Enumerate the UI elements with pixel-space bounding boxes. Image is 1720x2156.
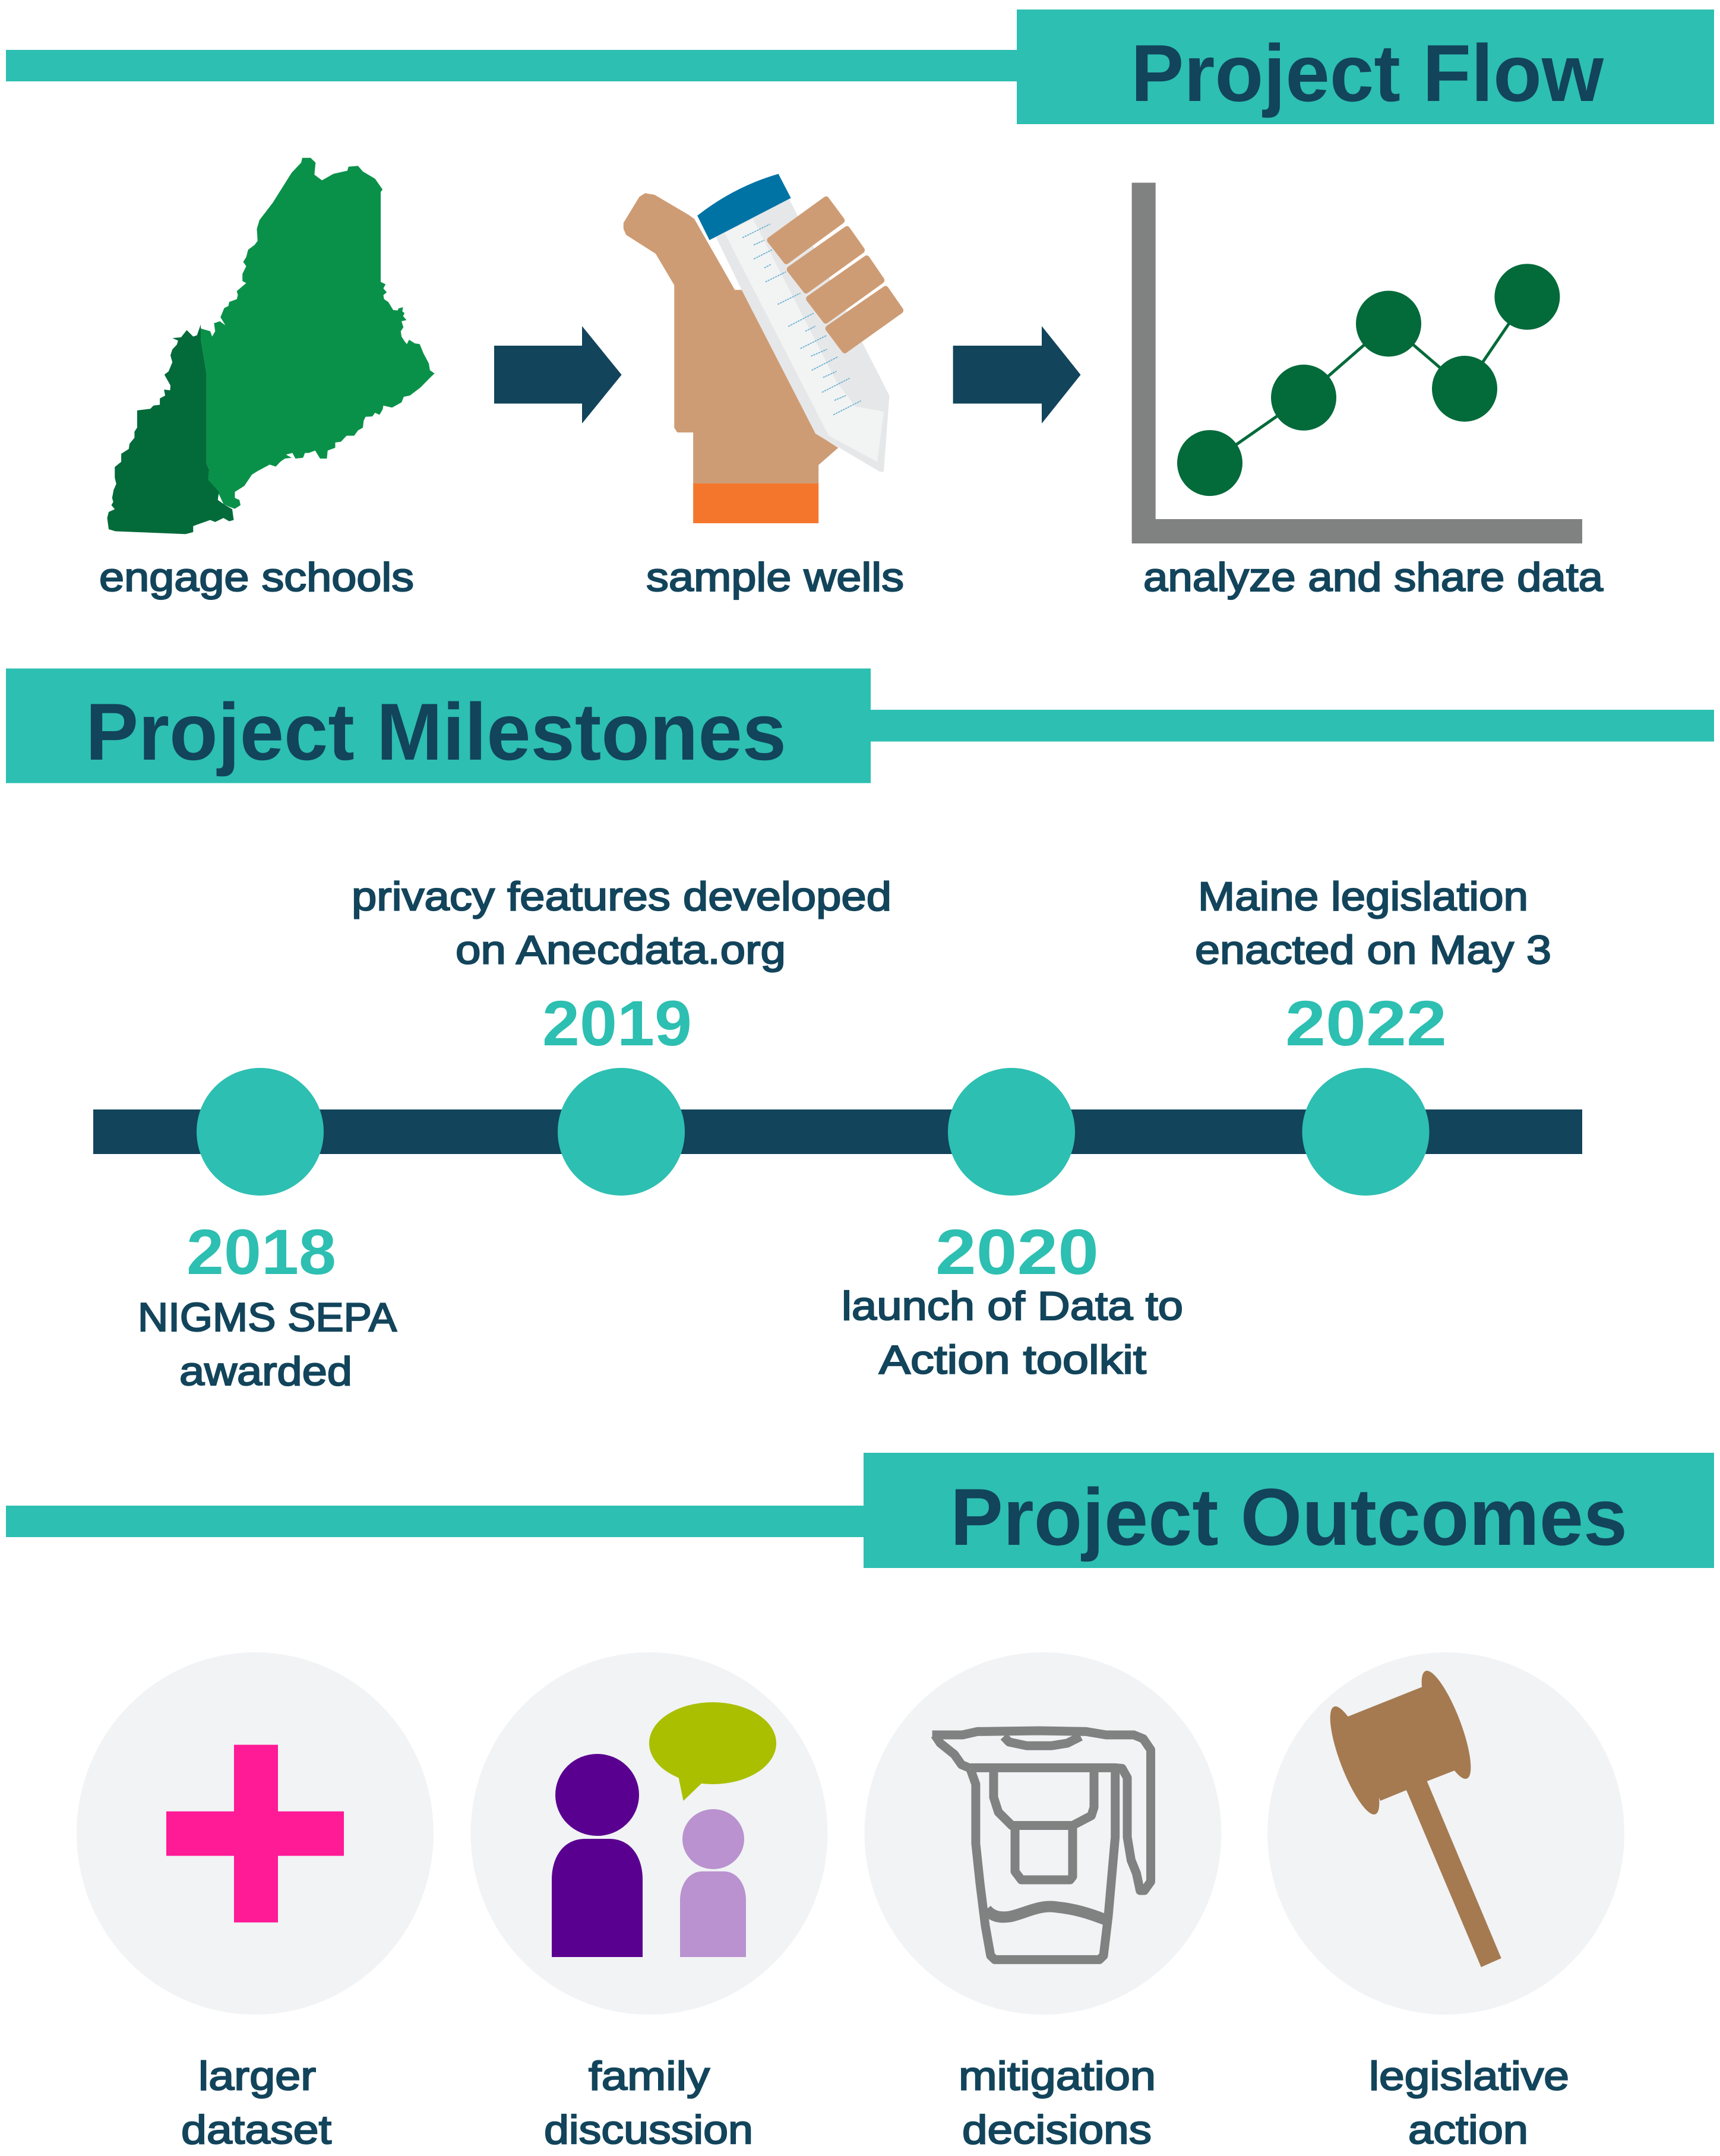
icon backdrop circle xyxy=(470,1652,828,2015)
map region: western Maine xyxy=(107,324,234,534)
header: Project Flow xyxy=(6,10,1714,124)
section: project outcomes xyxy=(6,1453,1714,2152)
icon: hand holding sample tube xyxy=(624,174,900,523)
milestone 2022 xyxy=(1195,874,1551,1059)
caption: legislative action: action xyxy=(1408,2107,1528,2152)
icon: speech bubble xyxy=(649,1702,776,1801)
milestone 2018: 2018 xyxy=(186,1216,336,1288)
chart axes xyxy=(1132,183,1582,543)
icon: water filter pitcher xyxy=(932,1731,1151,1959)
caption: mitigation decisions: decisions xyxy=(962,2107,1152,2152)
milestone 2020 xyxy=(842,1216,1183,1383)
caption: larger dataset: dataset xyxy=(181,2107,331,2152)
milestone 2018: NIGMS SEPA xyxy=(138,1295,397,1340)
caption: mitigation decisions xyxy=(959,2054,1156,2152)
caption: legislative action xyxy=(1369,2054,1569,2152)
milestone 2020: Action toolkit xyxy=(879,1338,1146,1383)
icon backdrop circle xyxy=(865,1652,1221,2015)
outcome: family discussion xyxy=(470,1652,828,2152)
caption: analyze and share data: analyze and share data xyxy=(1143,555,1603,600)
caption: engage schools: engage schools xyxy=(99,555,414,600)
milestone 2019 xyxy=(352,874,891,1059)
line chart icon xyxy=(1132,183,1582,543)
milestone 2020: 2020 xyxy=(935,1216,1099,1288)
header: Project Outcomes xyxy=(6,1453,1714,1568)
arrow: wells to data xyxy=(953,326,1081,423)
milestone 2019: privacy features developed xyxy=(352,874,891,919)
arrow: schools to wells xyxy=(494,326,622,423)
milestone 2022: enacted on May 3 xyxy=(1195,928,1551,973)
caption: family discussion xyxy=(544,2054,753,2152)
icon: gavel xyxy=(1321,1666,1501,1967)
milestone 2018: awarded xyxy=(179,1349,352,1394)
timeline bar xyxy=(93,1109,1582,1154)
hand palm xyxy=(624,193,838,484)
heading text: Project Milestones: Project Milestones xyxy=(86,687,786,777)
header: Project Milestones xyxy=(6,669,1714,783)
milestone 2018 xyxy=(138,1216,397,1394)
icon backdrop circle xyxy=(77,1652,434,2015)
caption: family discussion: family xyxy=(589,2054,710,2099)
milestone 2019: on Anecdata.org xyxy=(456,928,786,973)
heading text: Project Outcomes: Project Outcomes xyxy=(950,1472,1627,1562)
caption: larger dataset: larger xyxy=(198,2054,316,2099)
milestone 2019: 2019 xyxy=(542,987,692,1059)
tube cap xyxy=(697,174,791,240)
timeline node 2022 xyxy=(1302,1068,1429,1196)
heading text: Project Flow: Project Flow xyxy=(1131,28,1604,118)
timeline node 2019 xyxy=(558,1068,685,1196)
milestone 2020: launch of Data to xyxy=(842,1284,1183,1329)
outcome: larger dataset xyxy=(77,1652,434,2152)
icon: plus sign xyxy=(166,1745,344,1923)
icon: map of Maine xyxy=(107,158,435,534)
caption: legislative action: legislative xyxy=(1369,2054,1569,2099)
icon: adult figure xyxy=(552,1754,643,1957)
map region: eastern Maine xyxy=(201,158,435,509)
timeline node 2018 xyxy=(197,1068,324,1196)
chart line xyxy=(1210,297,1527,463)
caption: mitigation decisions: mitigation xyxy=(959,2054,1156,2099)
outcome: mitigation decisions xyxy=(865,1652,1221,2152)
fingers xyxy=(770,200,900,350)
outcome: legislative action xyxy=(1267,1652,1624,2152)
caption: larger dataset xyxy=(181,2054,331,2152)
milestone 2022: 2022 xyxy=(1285,987,1447,1059)
timeline node 2020 xyxy=(948,1068,1075,1196)
caption: family discussion: discussion xyxy=(544,2107,753,2152)
sleeve cuff xyxy=(693,483,818,523)
sample tube xyxy=(716,199,889,472)
chart data points xyxy=(1177,264,1560,496)
milestone 2022: Maine legislation xyxy=(1198,874,1528,919)
caption: sample wells: sample wells xyxy=(646,555,904,600)
icon backdrop circle xyxy=(1267,1652,1624,2015)
section: project milestones xyxy=(6,669,1714,1394)
icon: child figure xyxy=(680,1809,746,1957)
section: project flow xyxy=(6,10,1714,600)
timeline xyxy=(93,1068,1582,1196)
